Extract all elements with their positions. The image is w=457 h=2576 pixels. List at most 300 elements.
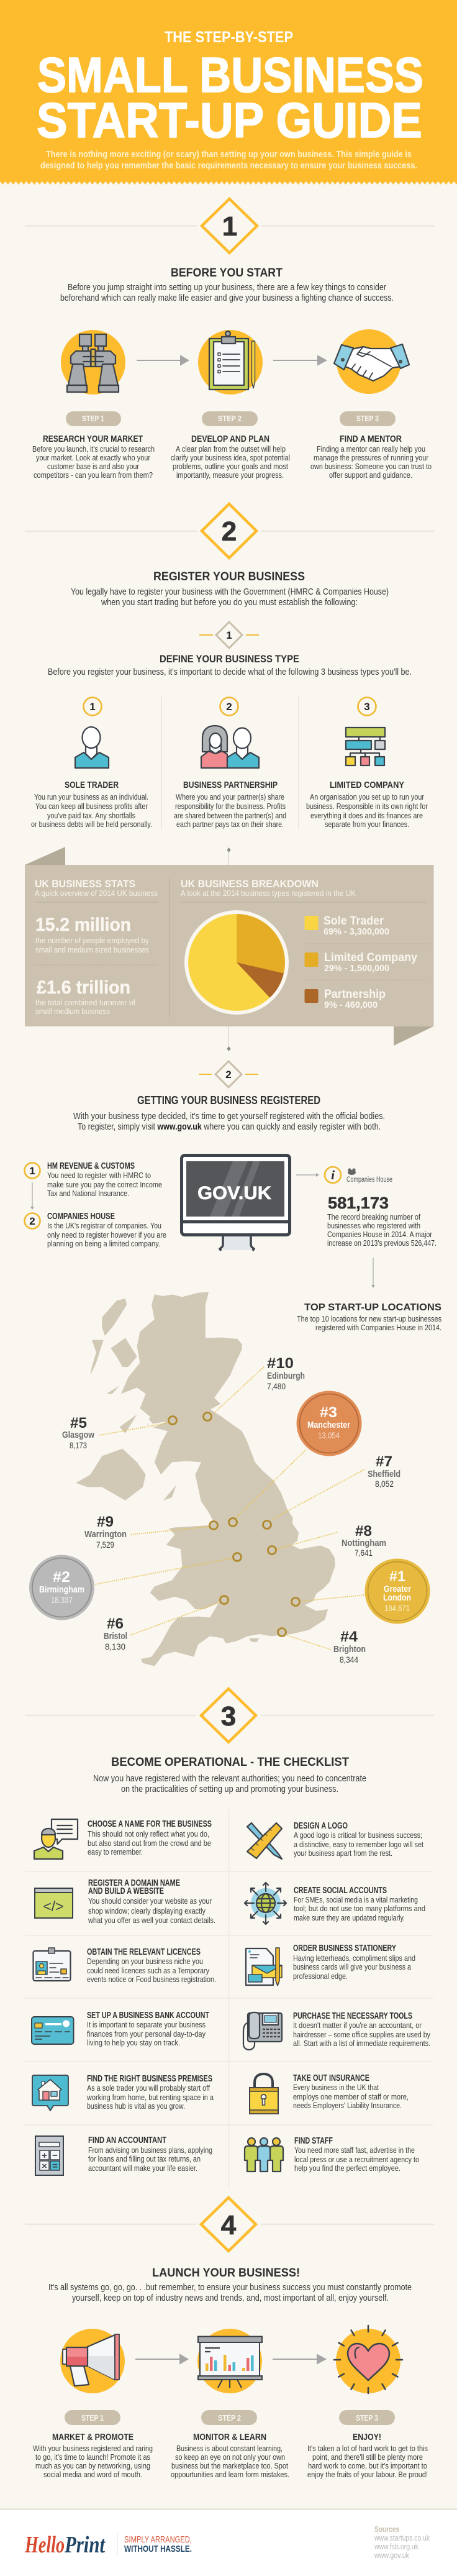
location: brighton: Brighton — [333, 1645, 366, 1655]
text: employs one member of staff or more, — [293, 2093, 409, 2101]
intro text: There is nothing more exciting (or scary) than setting up your own business. This simple guide is — [46, 150, 412, 160]
text: all. Start with a list of immediate requirements. — [293, 2039, 430, 2048]
text: your business apart from the rest. — [294, 1849, 392, 1858]
companies house logo — [346, 1168, 392, 1184]
title: ORDER BUSINESS STATIONERY — [293, 1943, 396, 1953]
step text: offer support and guidance. — [329, 471, 412, 480]
sources: www.startups.co.uk — [374, 2534, 430, 2542]
text: accountant will make your life easier. — [88, 2164, 197, 2173]
step pill: STEP 1 — [82, 414, 104, 423]
icon: browser window: </> — [43, 1898, 64, 1914]
stat: 581,173: businesses who registered with — [327, 1222, 420, 1230]
text: It is important to separate your business — [87, 2021, 206, 2029]
location: manchester: #3 — [320, 1404, 337, 1421]
stat: 581,173: 581,173 — [328, 1194, 389, 1212]
panel: companies house — [25, 1212, 166, 1248]
text: to go, it's time to launch! Promote it as — [35, 2453, 150, 2462]
title: PURCHASE THE NECESSARY TOOLS — [293, 2011, 412, 2021]
location: bristol: 8,130 — [105, 1642, 125, 1651]
step pill — [66, 411, 121, 426]
section 2 number marker: 2 — [222, 516, 237, 547]
icon: binoculars — [61, 330, 125, 395]
section 4 number marker — [25, 2198, 435, 2251]
location: greater london: #1 — [389, 1568, 405, 1585]
location: nottingham: #8 — [355, 1523, 372, 1540]
heading: HM REVENUE & CUSTOMS — [47, 1161, 135, 1171]
text: separate from your finances. — [325, 820, 409, 829]
text: working from home, but renting space in a — [86, 2093, 214, 2102]
text: a distinctive, easy to remember logo will set — [294, 1840, 423, 1849]
number badge — [220, 697, 238, 716]
sources: www.fsb.org.uk — [374, 2542, 419, 2551]
title: SET UP A BUSINESS BANK ACCOUNT — [87, 2011, 209, 2021]
text: hairdresser – some office supplies are used by — [293, 2030, 431, 2039]
location: manchester: 13,054 — [318, 1430, 340, 1440]
stat: 15.2 million — [35, 915, 149, 954]
location: bristol: Bristol — [104, 1632, 127, 1642]
text: point, and there'll still be plenty more — [312, 2453, 423, 2462]
step pill: STEP 2 — [218, 414, 242, 423]
text: easy to remember. — [88, 1848, 143, 1857]
text: With your business registered and raring — [33, 2444, 153, 2453]
title: START-UP GUIDE — [37, 93, 422, 148]
location: glasgow: #5 — [70, 1415, 87, 1432]
legend: limited company — [304, 951, 417, 974]
sub-heading: define your business type: DEFINE YOUR BUSINESS TYPE — [160, 654, 299, 665]
badge — [25, 1163, 40, 1178]
text: business. Responsible in its own right for — [306, 802, 428, 811]
icon: stationery — [246, 1948, 282, 1986]
section 2 number marker — [25, 504, 435, 558]
text — [87, 1957, 216, 1984]
location: nottingham — [342, 1523, 386, 1558]
text: Is the UK's registrar of companies. You — [47, 1222, 161, 1230]
uk business breakdown — [181, 878, 429, 1015]
icon: calculator: × — [42, 2161, 47, 2172]
sub-heading: getting registered: GETTING YOUR BUSINESS REGISTERED — [137, 1094, 320, 1107]
section 4 intro — [48, 2283, 412, 2303]
stat: 15.2 million: small and medium sized businesses — [35, 945, 149, 954]
icon: id card — [34, 1948, 71, 1981]
step pill — [340, 411, 396, 426]
step text: manage the pressures of running your — [314, 454, 428, 462]
text: You should consider your website as your — [88, 1897, 212, 1906]
northern ireland — [76, 1449, 146, 1500]
location: warrington: 7,529 — [96, 1540, 114, 1550]
section 2 intro: You legally have to register your business with the Government (HMRC & Companies House) — [71, 587, 389, 597]
step pill — [202, 411, 258, 426]
icon: monitor gov.uk: GOV.UK — [197, 1183, 271, 1204]
title: REGISTER A DOMAIN NAME — [88, 1878, 180, 1888]
panel: step 3 find a mentor — [310, 329, 432, 480]
text: help you find the perfect employee. — [294, 2164, 400, 2173]
text: each partner pays tax on their share. — [176, 820, 284, 829]
step text: A clear plan from the outset will help — [176, 445, 286, 454]
text: You need more staff fast, advertise in the — [294, 2146, 415, 2155]
text: make sure they are updated regularly. — [294, 1914, 405, 1922]
uk business stats: A quick overview of 2014 UK business — [35, 888, 158, 898]
panel: limited company — [306, 697, 428, 829]
text: responsibility for the business. Profits — [175, 802, 286, 811]
panel: sole trader — [31, 697, 152, 829]
panel: uk stats banner — [25, 847, 433, 1046]
text: are shared between the partner(s) and — [174, 811, 286, 820]
step text: own business: Someone you can trust to — [310, 462, 432, 471]
text — [306, 793, 428, 829]
text — [174, 793, 286, 829]
text: planning on being a limited company. — [47, 1240, 160, 1248]
sub-marker 2 — [199, 1061, 258, 1087]
uk business stats — [34, 878, 158, 1016]
step pill: STEP 3 — [356, 414, 379, 423]
step pill: STEP 3 — [356, 2413, 378, 2423]
text: living to help you stay on track. — [87, 2039, 180, 2047]
step pill: STEP 1 — [81, 2413, 104, 2423]
arrow — [273, 2355, 325, 2364]
location: birmingham: 18,337 — [51, 1595, 73, 1605]
title: DESIGN A LOGO — [294, 1821, 348, 1831]
heading: LIMITED COMPANY — [330, 780, 404, 790]
number badge — [358, 697, 376, 716]
icon: org chart — [346, 728, 385, 765]
text: professional edge. — [293, 1972, 348, 1981]
sources: www.gov.uk — [374, 2551, 410, 2560]
icon: calculator: − — [52, 2150, 58, 2161]
arrow — [135, 2355, 188, 2364]
icon: handshake — [334, 329, 409, 394]
info badge — [325, 1167, 341, 1183]
text: hard work to come, but it's important to — [308, 2462, 427, 2470]
step text: clarify your business idea, spot potential — [171, 454, 290, 462]
text: For SMEs, social media is a vital marketing — [294, 1896, 418, 1904]
location: birmingham: Birmingham — [39, 1585, 84, 1595]
text — [87, 2021, 206, 2047]
text: You can keep all business profits after — [35, 802, 148, 811]
companies house logo: Companies House — [346, 1176, 392, 1184]
footer tagline: WITHOUT HASSLE. — [124, 2544, 192, 2554]
section 4 intro: yourself, keep on top of industry news and trends, and, most important of all, enjoy yourself. — [72, 2293, 389, 2303]
pie chart — [184, 910, 289, 1015]
footer logo: helloprint: Print — [64, 2532, 106, 2558]
heading: COMPANIES HOUSE — [47, 1212, 115, 1222]
icon: bank card — [32, 2017, 73, 2044]
text: It's taken a lot of hard work to get to this — [307, 2444, 428, 2453]
checklist: insurance — [250, 2073, 409, 2114]
arrow — [273, 356, 326, 365]
text: tool; but do not use too many platforms and — [294, 1904, 425, 1913]
icon: person — [75, 727, 109, 768]
connector top — [227, 847, 231, 865]
text — [294, 2146, 419, 2173]
location: edinburgh: Edinburgh — [267, 1371, 305, 1381]
panel: business partnership — [174, 697, 286, 829]
section 3 intro: Now you have registered with the relevant authorities; you need to concentrate — [93, 1774, 366, 1784]
sub-marker 2: 2 — [225, 1069, 232, 1080]
icon: ruler and pencil — [247, 1823, 282, 1859]
footer logo: helloprint — [24, 2532, 106, 2558]
text: This should not only reflect what you do, — [88, 1830, 209, 1838]
islands — [91, 1299, 260, 1642]
step text — [32, 445, 155, 480]
badge: 2 — [29, 1215, 35, 1227]
step text: customer base is and also your — [47, 462, 139, 471]
section 3 number marker — [25, 1689, 435, 1742]
text: Every business in the UK that — [293, 2083, 379, 2092]
checklist: design a logo — [247, 1821, 423, 1859]
icon: browser window — [35, 1888, 73, 1918]
checklist: premises — [32, 2074, 214, 2111]
step pill — [201, 2410, 257, 2425]
location: brighton: 8,344 — [340, 1655, 358, 1665]
title: AND BUILD A WEBSITE — [88, 1886, 164, 1896]
step text: problems, outline your goals and most — [173, 462, 288, 471]
text: what you offer as well your contact details. — [88, 1916, 215, 1925]
text: Having letterheads, compliment slips and — [293, 1954, 415, 1963]
step pill: STEP 2 — [218, 2413, 241, 2423]
heading: ENJOY! — [353, 2432, 381, 2442]
heading: MARKET & PROMOTE — [52, 2432, 133, 2442]
checklist: stationery — [246, 1943, 415, 1986]
arrow — [137, 356, 188, 365]
text: only need to register however if you are — [47, 1231, 166, 1240]
text: so keep an eye on not only your own — [175, 2453, 285, 2462]
location: glasgow: 8,173 — [70, 1440, 87, 1450]
text: events notice or Food business registration. — [87, 1975, 216, 1984]
title: FIND AN ACCOUNTANT — [88, 2135, 166, 2145]
icon: calculator: + — [42, 2150, 47, 2161]
section 3 intro: on the practicalities of setting up and promoting your business. — [121, 1784, 338, 1794]
section 2 intro — [71, 587, 389, 608]
stat: 581,173: Companies House in 2014. A major — [327, 1230, 432, 1239]
legend: sole trader — [304, 915, 389, 937]
location: nottingham: Nottingham — [342, 1538, 386, 1548]
title: FIND STAFF — [294, 2136, 333, 2146]
text: You run your business as an individual. — [34, 793, 148, 802]
section 1 intro — [60, 283, 394, 303]
title — [37, 47, 423, 148]
text — [294, 1831, 423, 1858]
stat: 581,173 — [327, 1194, 437, 1248]
title — [88, 1878, 180, 1896]
section 2 heading: REGISTER YOUR BUSINESS — [153, 570, 305, 583]
title: CHOOSE A NAME FOR THE BUSINESS — [88, 1819, 212, 1829]
header banner — [0, 0, 457, 185]
legend: limited company: Limited Company — [324, 951, 417, 964]
text — [293, 2021, 431, 2048]
checklist: choose a name — [34, 1819, 212, 1859]
stat: 1.6 trillion — [35, 977, 135, 1016]
text — [293, 1954, 415, 1981]
checklist: social accounts — [245, 1883, 425, 1924]
connector bottom — [227, 1026, 231, 1051]
text: Business is about constant learning, — [176, 2444, 283, 2453]
badge: 1 — [29, 1165, 35, 1177]
define intro: Before you register your business, it's important to decide what of the following 3 business types you'll be. — [48, 667, 412, 677]
location: brighton — [333, 1628, 366, 1665]
checklist: staff — [245, 2136, 419, 2173]
icon: padlock — [250, 2074, 278, 2114]
location: glasgow: Glasgow — [62, 1430, 95, 1440]
info badge: i — [331, 1167, 335, 1182]
text: It doesn't matter if you're an accountant, or — [293, 2021, 422, 2030]
section 1 heading: BEFORE YOU START — [171, 266, 283, 280]
section 1 intro: beforehand which can really make life easier and give your business a fighting chance of success. — [60, 293, 394, 303]
heading: SOLE TRADER — [65, 780, 119, 790]
location: edinburgh: 7,480 — [267, 1381, 286, 1391]
icon: clipboard — [198, 330, 263, 395]
text: Tax and National Insurance. — [47, 1189, 129, 1198]
panel: step 2 develop and plan — [171, 330, 290, 480]
panel: step 1 research your market — [32, 330, 155, 480]
location: warrington — [84, 1514, 127, 1550]
top start-up locations heading: TOP START-UP LOCATIONS — [304, 1302, 441, 1313]
location: sheffield: 8,052 — [375, 1479, 394, 1489]
location: greater london — [365, 1558, 430, 1624]
icon: telephone — [243, 2012, 282, 2050]
step text: your market. Look at exactly who your — [36, 454, 150, 462]
panel: monitor and learn — [171, 2329, 289, 2479]
number badge: 3 — [364, 701, 370, 713]
text: Where you and your partner(s) share — [176, 793, 284, 802]
text: business but the marketplace too. Spot — [171, 2462, 288, 2470]
arrow down — [30, 1182, 34, 1210]
stat: 1.6 trillion: the total combined turnover of — [35, 998, 135, 1007]
text: could need licences such as a Temporary — [87, 1966, 210, 1975]
text: or business debts will be held personally. — [31, 820, 152, 829]
location: edinburgh: #10 — [267, 1355, 294, 1372]
arrow — [296, 1173, 319, 1177]
checklist: licences — [34, 1947, 216, 1984]
location: greater london: Greater — [384, 1584, 411, 1594]
icon: megaphone — [60, 2329, 125, 2393]
checklist: register a domain — [35, 1878, 215, 1925]
title: FIND THE RIGHT BUSINESS PREMISES — [87, 2074, 212, 2084]
text: make sure you pay the correct Income — [47, 1181, 162, 1189]
uk business breakdown: A look at the 2014 business types registered in the UK — [181, 888, 356, 898]
sub-marker 1: 1 — [226, 629, 232, 641]
location: birmingham — [29, 1555, 94, 1620]
step heading: DEVELOP AND PLAN — [191, 434, 269, 444]
step pill — [65, 2410, 120, 2425]
text: shop window; clearly displaying exactly — [88, 1907, 206, 1916]
location: warrington: Warrington — [84, 1530, 127, 1540]
heading: BUSINESS PARTNERSHIP — [183, 780, 278, 790]
heading: MONITOR & LEARN — [193, 2432, 266, 2442]
title: TAKE OUT INSURANCE — [293, 2073, 369, 2083]
step text — [310, 445, 432, 480]
location: bristol: #6 — [107, 1615, 124, 1632]
text: oppourtunities and learn form mistakes. — [171, 2470, 289, 2479]
location: sheffield: Sheffield — [368, 1469, 400, 1479]
text: needs Employers' Liability Insurance. — [293, 2101, 402, 2110]
section 4 number marker: 4 — [221, 2210, 237, 2240]
text — [88, 1897, 215, 1925]
text — [171, 2444, 289, 2479]
location: manchester: Manchester — [307, 1420, 350, 1430]
text — [294, 1896, 425, 1922]
location: bristol — [104, 1615, 127, 1651]
registering intro: To register, simply visit www.gov.uk where you can quickly and easily register with both. — [78, 1122, 381, 1132]
section 1 number marker — [25, 199, 435, 253]
sources — [374, 2524, 430, 2560]
step text: competitors - can you learn from them? — [34, 471, 153, 480]
text: You need to register with HMRC to — [47, 1171, 151, 1180]
text: for loans and filling out tax returns, an — [88, 2155, 201, 2163]
text — [31, 793, 152, 829]
text: enjoy the fruits of your labour. Be proud! — [307, 2470, 428, 2479]
arrow down — [371, 1258, 375, 1288]
text: A good logo is critical for business success; — [294, 1831, 422, 1840]
step heading: FIND A MENTOR — [340, 434, 402, 444]
icon: calculator: = — [52, 2161, 58, 2172]
stat: 1.6 trillion: small medium business — [35, 1007, 110, 1016]
section 1 number marker: 1 — [222, 211, 237, 242]
text: everything it does and its finances are — [310, 811, 423, 820]
location: sheffield — [368, 1453, 400, 1489]
text — [33, 2444, 153, 2479]
section 4 heading: LAUNCH YOUR BUSINESS! — [152, 2266, 300, 2280]
location: warrington: #9 — [97, 1514, 114, 1530]
section 1 intro: Before you jump straight into setting up your business, there are a few key things to consider — [68, 283, 386, 293]
legend: sole trader: 69% - 3,300,000 — [324, 927, 389, 937]
text: From advising on business plans, applying — [88, 2146, 212, 2155]
icon: monitor gov.uk — [181, 1156, 290, 1251]
sources: Sources — [374, 2524, 399, 2534]
text: social media and word of mouth. — [43, 2470, 142, 2479]
step heading: RESEARCH YOUR MARKET — [43, 434, 143, 444]
stat: 15.2 million: the number of people employed by — [35, 936, 149, 945]
panel: enjoy — [307, 2326, 428, 2479]
text — [293, 2083, 409, 2110]
text: local press or use a recruitment agency to — [294, 2155, 419, 2164]
text: much as you can by networking, using — [35, 2462, 150, 2470]
text: but also stand out from the crowd and be — [88, 1839, 211, 1848]
location: glasgow — [62, 1415, 95, 1450]
legend: limited company: 29% - 1,500,000 — [324, 964, 389, 974]
text: business hub is vital as you grow. — [87, 2102, 185, 2111]
icon: person with speech bubble — [34, 1819, 78, 1859]
text: business cards will give your business a — [293, 1963, 411, 1971]
legend: partnership: 9% - 460,000 — [324, 1000, 378, 1010]
location: brighton: #4 — [340, 1628, 358, 1645]
title: OBTAIN THE RELEVANT LICENCES — [87, 1947, 201, 1957]
checklist: accountant — [35, 2135, 212, 2175]
stat: 581,173: The record breaking number of — [327, 1213, 420, 1222]
step text: importantly, measure your progress. — [176, 471, 284, 480]
text: you've paid tax. Any shortfalls — [47, 811, 135, 820]
stat: 581,173: increase on 2013's previous 526,447. — [327, 1239, 437, 1248]
footer tagline: SIMPLY ARRANGED, — [124, 2534, 192, 2545]
step text — [171, 445, 290, 480]
map leader lines and markers — [95, 1367, 364, 1650]
legend: sole trader: Sole Trader — [324, 915, 384, 928]
location: manchester — [297, 1391, 361, 1456]
step pill — [339, 2410, 395, 2425]
location: greater london: 184,671 — [384, 1603, 410, 1613]
section 3 number marker: 3 — [221, 1701, 236, 1732]
registering intro — [73, 1112, 385, 1132]
location: birmingham: #2 — [53, 1569, 70, 1586]
number badge — [83, 697, 102, 716]
icon: presentation board — [197, 2329, 262, 2393]
registering intro: With your business type decided, it's time to get yourself registered with the official bodies. — [73, 1112, 385, 1121]
section 3 heading: BECOME OPERATIONAL - THE CHECKLIST — [111, 1755, 349, 1769]
icon: heart with rays — [334, 2326, 402, 2393]
step text: Finding a mentor can really help you — [317, 445, 425, 454]
text: As a sole trader you will probably start off — [87, 2084, 210, 2093]
text: An organisation you set up to run your — [310, 793, 424, 802]
kicker: the step-by-step: THE STEP-BY-STEP — [165, 29, 293, 46]
